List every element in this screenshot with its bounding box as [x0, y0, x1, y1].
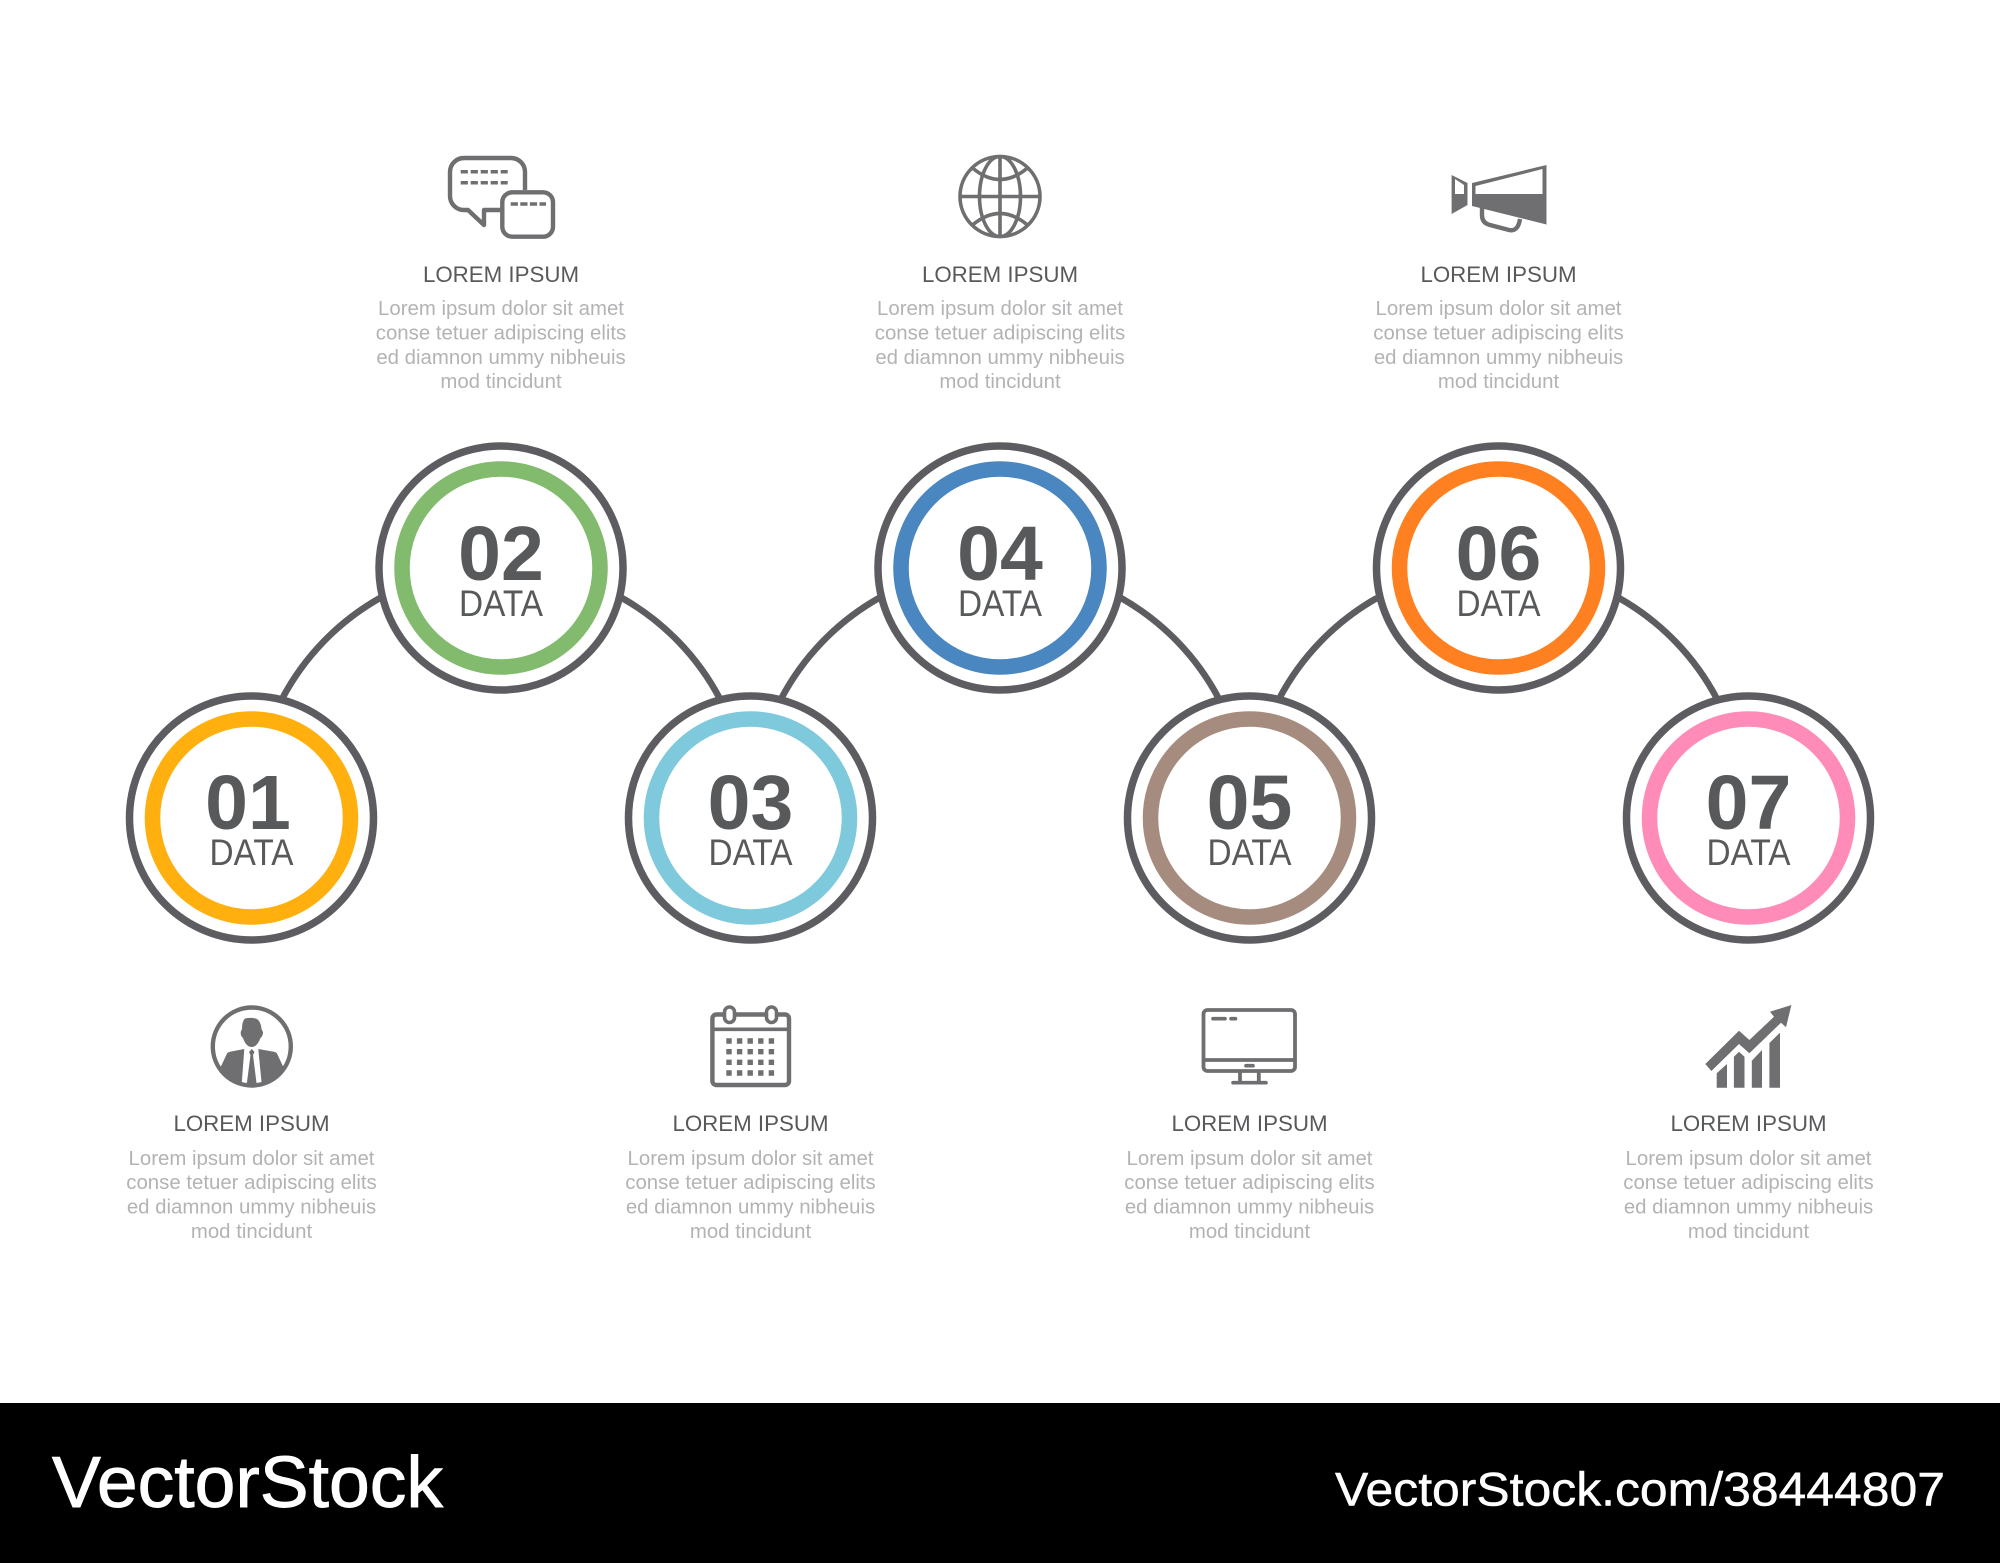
timeline connector arcs: [282, 598, 1717, 699]
text block: step 01: ed diamnon ummy nibheuis: [127, 1196, 376, 1218]
icon: growth chart: [1705, 1005, 1791, 1088]
text block: step 03: Lorem ipsum dolor sit amet: [628, 1148, 874, 1170]
step 04 circle: 04: [957, 511, 1043, 597]
icon: chat bubbles: [450, 158, 553, 237]
text block: step 01: [126, 1111, 377, 1243]
step 01 circle: 01: [205, 760, 291, 846]
text block: step 05: mod tincidunt: [1189, 1221, 1310, 1243]
footer band: VectorStock.com/38444807: [1335, 1464, 1945, 1516]
step 07 circle: DATA: [1706, 832, 1791, 873]
step 05 circle: DATA: [1208, 832, 1292, 873]
text block: step 02: conse tetuer adipiscing elits: [376, 322, 626, 344]
text block: step 07: mod tincidunt: [1688, 1221, 1809, 1243]
text block: step 05: LOREM IPSUM: [1171, 1111, 1328, 1136]
text block: step 01: Lorem ipsum dolor sit amet: [129, 1148, 375, 1170]
step 06 circle: 06: [1456, 511, 1541, 597]
text block: step 04: Lorem ipsum dolor sit amet: [877, 298, 1123, 320]
text block: step 06: mod tincidunt: [1438, 371, 1559, 393]
text block: step 04: conse tetuer adipiscing elits: [875, 322, 1125, 344]
text block: step 05: conse tetuer adipiscing elits: [1124, 1172, 1375, 1194]
text block: step 01: mod tincidunt: [191, 1221, 312, 1243]
step 05 circle: [1128, 696, 1372, 940]
text block: step 06: conse tetuer adipiscing elits: [1373, 322, 1624, 344]
step 04 circle: DATA: [958, 583, 1042, 624]
step 07 circle: [1626, 696, 1870, 940]
icon: megaphone: [1452, 165, 1546, 230]
icon: businessman: [213, 1008, 291, 1086]
step 04 circle: [878, 446, 1122, 690]
text block: step 01: conse tetuer adipiscing elits: [126, 1172, 377, 1194]
step 05 circle: 05: [1207, 760, 1292, 846]
text block: step 07: LOREM IPSUM: [1670, 1111, 1827, 1136]
step 06 circle: [1376, 446, 1620, 690]
text block: step 04: LOREM IPSUM: [922, 262, 1078, 287]
icon: desktop monitor: [1203, 1010, 1295, 1083]
text block: step 04: mod tincidunt: [939, 371, 1061, 393]
step 03 circle: DATA: [708, 832, 793, 873]
text block: step 01: LOREM IPSUM: [173, 1111, 330, 1136]
step 07 circle: 07: [1706, 760, 1791, 846]
text block: step 04: [875, 262, 1125, 393]
step 02 circle: DATA: [459, 583, 543, 624]
step 03 circle: 03: [708, 760, 793, 846]
text block: step 02: mod tincidunt: [440, 371, 562, 393]
footer band: [0, 1403, 2000, 1563]
text block: step 02: [376, 262, 626, 393]
text block: step 03: mod tincidunt: [690, 1221, 811, 1243]
text block: step 04: ed diamnon ummy nibheuis: [875, 347, 1125, 369]
text block: step 06: [1373, 262, 1624, 393]
step 01 circle: [130, 696, 374, 940]
text block: step 05: [1124, 1111, 1375, 1243]
step 02 circle: [379, 446, 623, 690]
text block: step 03: LOREM IPSUM: [672, 1111, 829, 1136]
text block: step 06: Lorem ipsum dolor sit amet: [1376, 298, 1622, 320]
text block: step 03: [625, 1111, 876, 1243]
step 06 circle: DATA: [1456, 583, 1541, 624]
step 02 circle: 02: [458, 511, 544, 597]
text block: step 07: Lorem ipsum dolor sit amet: [1626, 1148, 1872, 1170]
text block: step 02: ed diamnon ummy nibheuis: [376, 347, 626, 369]
step 01 circle: DATA: [210, 832, 294, 873]
step 03 circle: [628, 696, 872, 940]
text block: step 02: Lorem ipsum dolor sit amet: [378, 298, 624, 320]
text block: step 02: LOREM IPSUM: [423, 262, 579, 287]
text block: step 07: conse tetuer adipiscing elits: [1623, 1172, 1874, 1194]
icon: globe: [960, 156, 1040, 236]
text block: step 03: conse tetuer adipiscing elits: [625, 1172, 876, 1194]
icon: calendar: [712, 1007, 789, 1085]
text block: step 03: ed diamnon ummy nibheuis: [626, 1196, 875, 1218]
footer band: VectorStock: [52, 1443, 444, 1523]
text block: step 07: [1623, 1111, 1874, 1243]
text block: step 07: ed diamnon ummy nibheuis: [1624, 1196, 1873, 1218]
text block: step 05: ed diamnon ummy nibheuis: [1125, 1196, 1374, 1218]
text block: step 06: LOREM IPSUM: [1420, 262, 1577, 287]
text block: step 05: Lorem ipsum dolor sit amet: [1127, 1148, 1373, 1170]
text block: step 06: ed diamnon ummy nibheuis: [1374, 347, 1623, 369]
